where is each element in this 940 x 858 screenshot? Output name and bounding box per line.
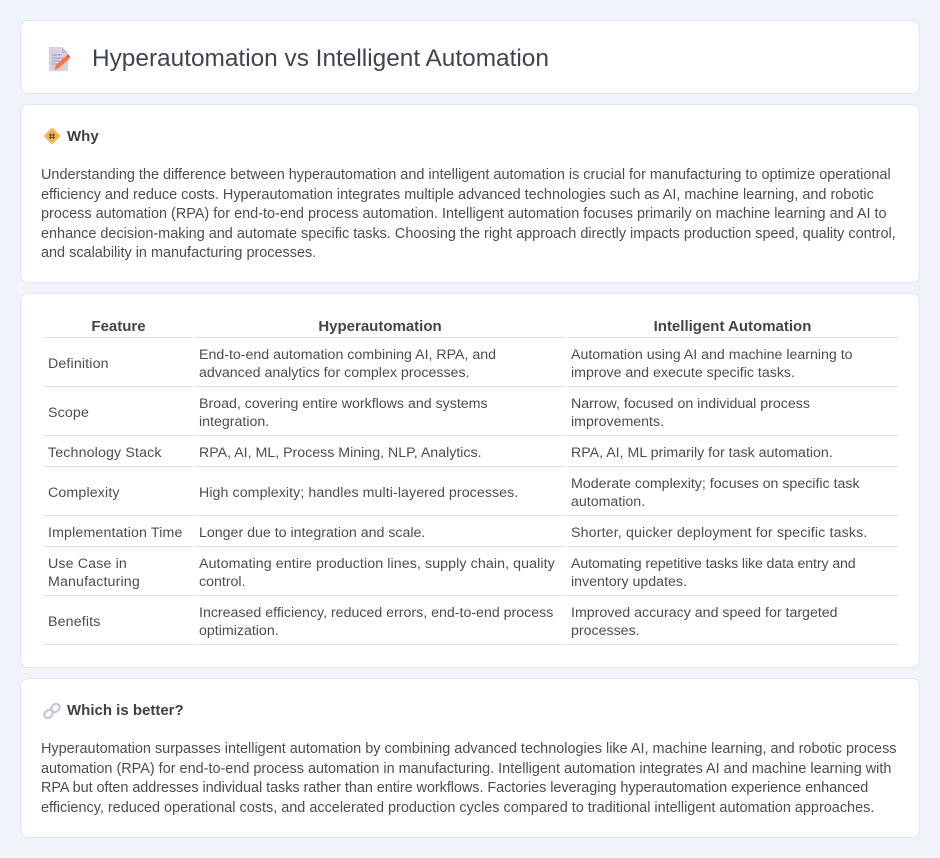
row: definition: Automation using AI and machine learning to [571, 347, 853, 363]
icon: warning diamond [44, 128, 60, 144]
row: complexity: Complexity [48, 485, 120, 501]
row: scope: improvements. [571, 414, 664, 430]
row: use case in manufacturing: Use Case in [48, 556, 127, 572]
row: implementation time: Implementation Time [48, 525, 183, 541]
verdict paragraph: automation (RPA) for end-to-end process automation in manufacturing. Intelligent automation integrates AI and machine learning with [41, 760, 891, 776]
title text: Hyperautomation vs Intelligent Automation [92, 45, 549, 72]
verdict paragraph: efficiency, reduced operational costs, and accelerated production cycles compared to traditional intelligent automation approaches. [41, 800, 874, 816]
table header row [44, 318, 898, 338]
row: definition: advanced analytics for complex processes. [199, 365, 469, 381]
row: technology stack: Technology Stack [48, 445, 162, 461]
verdict paragraph: Hyperautomation surpasses intelligent automation by combining advanced technologies like AI, machine learning, and robotic process [41, 741, 897, 757]
why paragraph: efficiency and reduce costs. Hyperautomation integrates multiple advanced technologies such as AI, machine learning, and robotic [41, 186, 874, 202]
row: benefits: Increased efficiency, reduced errors, end-to-end process [199, 605, 553, 621]
why paragraph [41, 167, 896, 261]
row: complexity [44, 476, 898, 516]
table header row: Intelligent Automation [654, 318, 811, 335]
row: benefits [44, 605, 898, 645]
verdict paragraph: RPA but often addresses individual tasks rather than entire workflows. Factories leveraging hyperautomation experience enhanced [41, 780, 868, 796]
why paragraph: process automation (RPA) for end-to-end process automation. Intelligent automation focuses primarily on machine learning and AI to [41, 206, 887, 222]
row: implementation time: Shorter, quicker deployment for specific tasks. [571, 525, 867, 541]
row: benefits: Benefits [48, 614, 100, 630]
row: complexity: High complexity; handles multi-layered processes. [199, 485, 518, 501]
table header row: Hyperautomation [318, 318, 442, 335]
row: technology stack: RPA, AI, ML, Process Mining, NLP, Analytics. [199, 445, 482, 461]
row: definition: End-to-end automation combining AI, RPA, and [199, 347, 496, 363]
row: scope: Narrow, focused on individual process [571, 396, 810, 412]
icon: document with pencil [49, 47, 70, 71]
panel: which is better [20, 678, 920, 838]
row: definition [44, 347, 898, 387]
row: scope: Broad, covering entire workflows and systems [199, 396, 488, 412]
row: definition: Definition [48, 356, 109, 372]
panel: title [20, 20, 920, 94]
heading: why: Why [67, 128, 99, 145]
panel: why [20, 104, 920, 283]
row: implementation time: Longer due to integration and scale. [199, 525, 425, 541]
row: benefits: Improved accuracy and speed for targeted [571, 605, 838, 621]
why paragraph: Understanding the difference between hyperautomation and intelligent automation is crucial for manufacturing to optimize operational [41, 167, 891, 183]
row: technology stack [44, 445, 898, 467]
row: definition: improve and execute specific tasks. [571, 365, 795, 381]
row: complexity: automation. [571, 494, 645, 510]
row: complexity: Moderate complexity; focuses on specific task [571, 476, 860, 492]
why paragraph: enhance decision-making and automate specific tasks. Choosing the right approach directly impacts production speed, quality control, [41, 226, 896, 242]
row: benefits: optimization. [199, 623, 279, 639]
row: use case in manufacturing: control. [199, 574, 246, 590]
row: benefits: processes. [571, 623, 640, 639]
verdict paragraph [41, 741, 897, 816]
row: use case in manufacturing: Automating entire production lines, supply chain, quality [199, 556, 555, 572]
row: use case in manufacturing: Manufacturing [48, 574, 140, 590]
row: use case in manufacturing: Automating repetitive tasks like data entry and [571, 556, 856, 572]
panel: comparison table [20, 293, 920, 668]
row: implementation time [44, 525, 898, 547]
table header row: Feature [91, 318, 146, 335]
why paragraph: and scalability in manufacturing processes. [41, 245, 316, 261]
row: technology stack: RPA, AI, ML primarily for task automation. [571, 445, 833, 461]
icon: chain link [43, 702, 61, 720]
row: use case in manufacturing [44, 556, 898, 596]
row: scope: integration. [199, 414, 269, 430]
heading: which is better: Which is better? [67, 702, 184, 719]
row: scope [44, 396, 898, 436]
row: use case in manufacturing: inventory updates. [571, 574, 687, 590]
row: scope: Scope [48, 405, 89, 421]
